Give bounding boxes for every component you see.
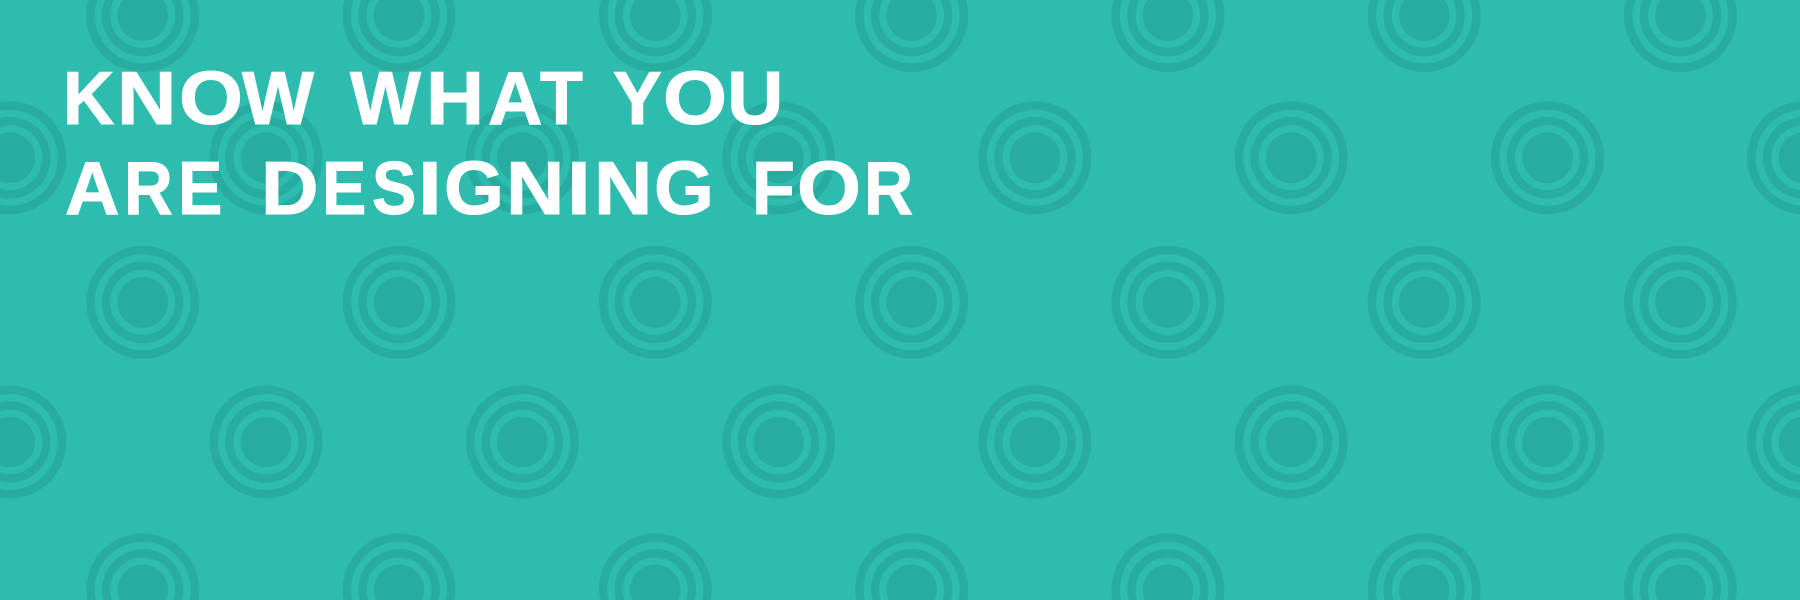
title line 2: G bbox=[654, 146, 714, 230]
title line 2: A bbox=[65, 146, 120, 230]
title line 2: R bbox=[864, 146, 913, 230]
title line 2: S bbox=[372, 146, 416, 230]
title line 2: I bbox=[418, 146, 442, 230]
title line 1: Y bbox=[613, 56, 662, 140]
title line 1: T bbox=[540, 56, 583, 140]
title line 1: U bbox=[727, 56, 784, 140]
title line 1: O bbox=[662, 56, 727, 140]
title line 1 bbox=[63, 56, 784, 140]
title line 1: H bbox=[426, 56, 484, 140]
title line 1: A bbox=[488, 56, 543, 140]
title line 1: W bbox=[242, 56, 314, 140]
title line 2: G bbox=[444, 146, 504, 230]
title line 2: D bbox=[261, 146, 318, 230]
title line 2 bbox=[65, 146, 913, 230]
title line 1: O bbox=[179, 56, 243, 140]
title line 1: N bbox=[117, 56, 176, 140]
title line 1: K bbox=[63, 56, 114, 140]
title line 2: E bbox=[322, 146, 366, 230]
title bbox=[63, 56, 913, 230]
title line 2: N bbox=[506, 146, 564, 230]
title line 2: N bbox=[594, 146, 652, 230]
title line 2: O bbox=[796, 146, 861, 230]
title line 2: E bbox=[178, 146, 222, 230]
title line 2: F bbox=[752, 146, 794, 230]
title line 2: I bbox=[567, 146, 591, 230]
title line 1: W bbox=[350, 56, 421, 140]
title line 2: R bbox=[124, 146, 173, 230]
